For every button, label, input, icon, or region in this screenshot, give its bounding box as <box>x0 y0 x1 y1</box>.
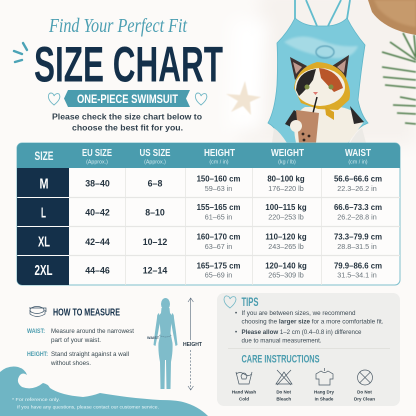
size table: 176–220 lb <box>268 184 304 193</box>
care labels: Hang Dry <box>314 390 334 394</box>
tips text: choosing the larger size for a more comfortable fit. <box>242 320 384 326</box>
care labels: Bleach <box>276 396 291 402</box>
tips text: Please allow 1–2 cm (0.4–0.8 in) difference <box>242 330 362 336</box>
table header: SIZE <box>34 149 54 163</box>
size table: 26.2–28.8 in <box>337 213 377 222</box>
wave decoration <box>0 367 208 416</box>
size column: M <box>40 176 48 192</box>
intro text <box>52 112 202 132</box>
subtitle: find your perfect fit: Find Your Perfect Fit <box>48 15 187 37</box>
tips text: If you are between sizes, we recommend <box>242 311 356 317</box>
icon: tape measure <box>29 306 46 316</box>
fluffy white backdrop <box>228 0 416 145</box>
icon: do not bleach <box>276 370 292 385</box>
size column: XL <box>38 234 50 250</box>
size table: 100–115 kg <box>265 203 307 212</box>
size table: 31.5–34.1 in <box>337 271 377 280</box>
table header: (cm / in) <box>348 160 368 166</box>
size column <box>17 168 69 285</box>
size table: 28.8–31.5 in <box>337 242 377 251</box>
table values: 38–40 <box>85 178 110 188</box>
size table: 150–160 cm <box>197 175 240 184</box>
size table: 22.3–26.2 in <box>337 184 377 193</box>
heading: care instructions: CARE INSTRUCTIONS <box>242 354 320 366</box>
care labels: Cold <box>239 396 249 402</box>
intro text: choose the best fit for you. <box>72 124 183 132</box>
height label: HEIGHT <box>183 342 203 348</box>
size table <box>17 143 400 285</box>
table header: EU SIZE <box>82 147 112 159</box>
table header: US SIZE <box>140 147 170 159</box>
tips text <box>235 311 384 344</box>
table background <box>17 143 400 285</box>
measure instructions: without shoes. <box>50 360 91 367</box>
table values: 10–12 <box>143 237 167 247</box>
waist label: WAIST <box>147 336 160 340</box>
care labels: Do Not <box>276 390 292 394</box>
banner: one-piece swimsuit: ONE-PIECE SWIMSUIT <box>77 92 179 106</box>
tips text: • <box>235 330 237 336</box>
waist label <box>147 335 172 340</box>
table header: WEIGHT <box>271 147 304 159</box>
measure instructions: Measure around the narrowest <box>51 328 134 335</box>
size column: L <box>41 204 46 222</box>
title: SIZE CHART <box>34 36 223 92</box>
size column: 2XL <box>34 262 52 279</box>
icon: hand wash <box>236 372 252 384</box>
table header <box>17 143 400 168</box>
size table: 61–65 in <box>205 213 232 222</box>
swimsuit straps <box>295 0 350 26</box>
table header: (cm / in) <box>209 160 229 166</box>
leg openings <box>272 128 366 143</box>
size table: 120–140 kg <box>265 261 307 270</box>
care labels: Do Not <box>357 390 372 394</box>
care labels <box>232 390 375 402</box>
size table: 79.9–86.6 cm <box>334 261 382 270</box>
measure instructions <box>27 328 134 367</box>
size table: 155–165 cm <box>197 203 240 212</box>
table values: 40–42 <box>85 208 110 218</box>
size table: 265–309 lb <box>268 271 304 280</box>
footnote: * For reference only. <box>12 397 60 403</box>
table grid <box>69 168 400 285</box>
banner: one-piece swimsuit <box>64 90 190 107</box>
table header: WAIST <box>345 147 371 159</box>
icon: sparkle marks <box>14 43 27 62</box>
size table: 243–265 lb <box>268 242 304 251</box>
cat illustration <box>285 55 364 143</box>
swimsuit body <box>268 18 368 143</box>
size table: 165–175 cm <box>197 261 240 270</box>
size table: 66.6–73.3 cm <box>334 203 382 212</box>
care labels: in Shade <box>315 396 334 402</box>
table header: (Approx.) <box>144 160 166 166</box>
size table: 80–100 kg <box>267 175 305 184</box>
height arrow <box>188 298 193 390</box>
table values: 8–10 <box>145 208 165 218</box>
intro text: Please check the size chart below to <box>52 112 202 122</box>
tips text: • <box>235 311 237 317</box>
body silhouette <box>154 298 178 389</box>
table header: HEIGHT <box>204 147 235 159</box>
size table: 160–170 cm <box>197 233 240 242</box>
size table: 56.6–66.6 cm <box>334 175 382 184</box>
size table: 73.3–79.9 cm <box>334 233 382 242</box>
icon: heart tips <box>224 296 236 308</box>
table values <box>85 178 167 276</box>
icon: do not dry clean <box>358 370 372 385</box>
icon: starfish <box>226 81 261 115</box>
table header: (kg / lb) <box>278 160 296 166</box>
table header: (Approx.) <box>86 160 108 166</box>
table values: 12–14 <box>143 266 167 276</box>
size table: 65–69 in <box>205 271 232 280</box>
table values: 6–8 <box>148 178 162 188</box>
heading: tips: TIPS <box>242 297 259 309</box>
care labels: Dry Clean <box>354 396 375 402</box>
footnote: If you have any questions, please contact our customer service. <box>17 404 159 410</box>
table values: 42–44 <box>85 237 110 247</box>
measure instructions: WAIST: <box>27 328 45 335</box>
size table: 59–63 in <box>205 184 232 193</box>
measure instructions: Stand straight against a wall <box>51 351 129 358</box>
panel: tips and care <box>217 293 400 406</box>
measure instructions: part of your waist. <box>51 337 101 344</box>
footnote <box>12 397 159 410</box>
heading: how to measure: HOW TO MEASURE <box>53 308 120 318</box>
table values: 44–46 <box>85 266 110 276</box>
size table: 63–67 in <box>205 242 232 251</box>
size table: 110–120 kg <box>265 233 307 242</box>
size table: 220–253 lb <box>268 213 304 222</box>
icon: palm frond <box>382 33 416 124</box>
swimsuit illustration <box>268 0 368 143</box>
measure instructions: HEIGHT: <box>27 351 48 358</box>
icon: heart right <box>195 93 207 105</box>
icon: straw hat <box>368 0 416 35</box>
care labels: Hand Wash <box>232 390 256 394</box>
icon: hang dry <box>316 368 333 385</box>
icon: heart left <box>48 93 60 105</box>
tips text: due to manual measurement. <box>242 338 322 344</box>
